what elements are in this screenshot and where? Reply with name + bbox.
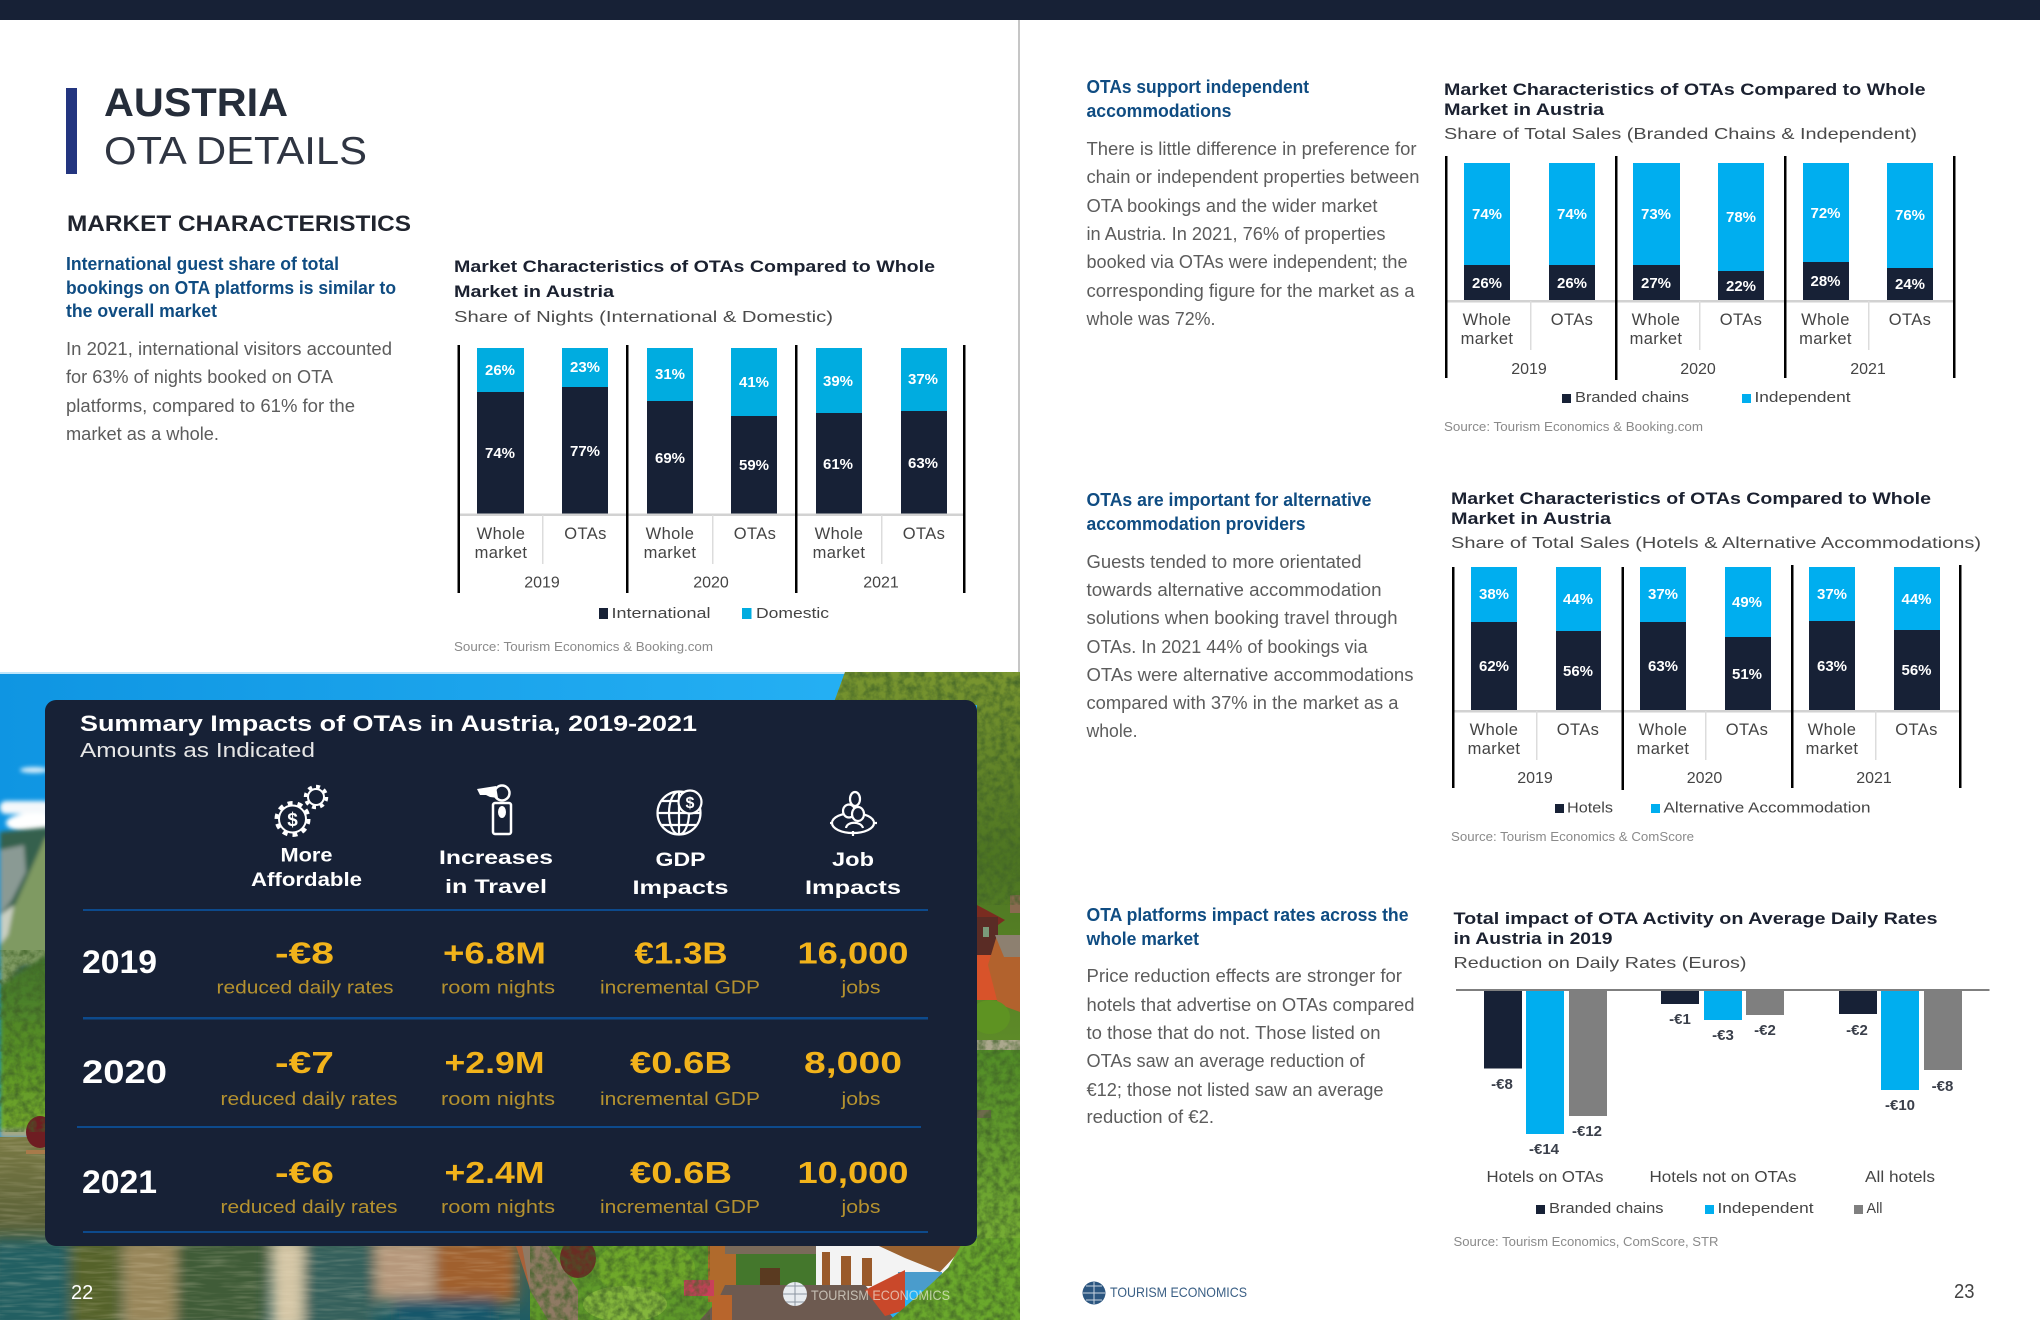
stacked bars: 26%	[485, 362, 515, 379]
chart heading: Market Characteristics of OTAs Compared to Whole	[454, 257, 935, 276]
page number 22: 22	[71, 1282, 93, 1304]
stacked bars: 38%	[1479, 586, 1509, 603]
row 2019	[82, 936, 908, 998]
value labels: -€2	[1846, 1022, 1868, 1039]
chart heading	[454, 257, 935, 326]
axis labels: Whole	[1808, 721, 1856, 739]
text block: impact on rates: €12; those not listed saw an average	[1086, 1080, 1384, 1100]
legend: Independent	[1718, 1200, 1814, 1217]
row 2019: 2019	[82, 944, 157, 980]
icon: globe with coin	[658, 790, 702, 835]
stacked bars: 51%	[1732, 666, 1762, 683]
text block: international guest share	[66, 254, 396, 444]
value labels: -€8	[1932, 1078, 1953, 1095]
axis labels: Whole	[815, 525, 863, 543]
stacked bars: 49%	[1732, 594, 1762, 611]
text block: impact on rates: hotels that advertise on OTAs compared	[1086, 995, 1414, 1015]
axis labels: OTAs	[1889, 311, 1931, 329]
row 2020: reduced daily rates	[220, 1089, 398, 1109]
stacked bars: 74%	[1557, 206, 1587, 223]
foliage texture	[0, 672, 1020, 1320]
axis labels: market	[1806, 740, 1858, 758]
text block: alternative accommodation: OTAs are important for alternative	[1086, 490, 1372, 510]
chart: reduction on daily rates	[1454, 909, 1990, 1249]
axis labels: OTAs	[1726, 721, 1768, 739]
text block: international guest share: International guest share of total	[66, 254, 339, 274]
row 2020	[82, 1045, 902, 1109]
chart heading	[1454, 909, 1938, 972]
right chalets	[970, 895, 1020, 1118]
stacked bars: 73%	[1641, 206, 1671, 223]
axis labels: 2019	[524, 574, 560, 592]
axis labels: market	[813, 544, 865, 562]
legend	[1555, 800, 1870, 816]
chart heading: Share of Total Sales (Hotels & Alternative Accommodations)	[1451, 535, 1981, 552]
logo: Tourism Economics: TOURISM ECONOMICS	[1110, 1284, 1247, 1300]
value labels: -€1	[1669, 1011, 1691, 1028]
axis labels: market	[1637, 740, 1689, 758]
source: Source: Tourism Economics & Booking.com	[454, 639, 713, 654]
stacked bars: 74%	[1472, 206, 1502, 223]
row 2020: €0.6B	[630, 1045, 732, 1080]
top navy bar	[0, 0, 2040, 20]
axis labels: Whole	[1470, 721, 1518, 739]
axis labels: OTAs	[1551, 311, 1593, 329]
background photo: Hallstatt lake village	[0, 672, 1020, 1320]
text block: impact on rates: OTA platforms impact rates across the	[1086, 905, 1408, 925]
stacked bars: 56%	[1901, 662, 1932, 679]
text block: independent accommodations: chain or independent properties between	[1086, 167, 1420, 187]
value labels: -€12	[1572, 1123, 1602, 1140]
axis labels: OTAs	[1895, 721, 1938, 739]
axis labels	[475, 525, 945, 592]
text block: independent accommodations	[1086, 77, 1420, 329]
legend	[1536, 1200, 1882, 1217]
panel: summary impacts	[45, 700, 977, 1246]
text block: alternative accommodation: Guests tended to more orientated	[1086, 552, 1362, 572]
axis labels: 2019	[1517, 770, 1553, 787]
text block: independent accommodations: in Austria. In 2021, 76% of properties	[1086, 224, 1386, 244]
column headers: Affordable	[251, 870, 362, 891]
left mountain	[0, 826, 60, 1138]
axis labels: Whole	[646, 525, 694, 543]
text block: independent accommodations: whole was 72%.	[1086, 309, 1216, 329]
row 2020: jobs	[840, 1089, 880, 1109]
axis labels: Whole	[1801, 311, 1850, 329]
logo on photo	[783, 1282, 950, 1306]
title block	[66, 81, 367, 174]
legend	[1562, 389, 1851, 406]
stacked bars: 31%	[655, 366, 685, 383]
panel heading	[80, 711, 697, 762]
text block: international guest share: for 63% of nights booked on OTA	[66, 367, 333, 387]
row 2021: 2021	[82, 1164, 157, 1200]
text block: independent accommodations: corresponding figure for the market as a	[1086, 281, 1416, 301]
icon: people in target	[830, 792, 877, 836]
stacked bars: 61%	[823, 456, 853, 473]
axis labels: 2020	[1680, 361, 1716, 378]
text block: impact on rates: OTAs saw an average reduction of	[1086, 1051, 1366, 1071]
legend: Branded chains	[1575, 389, 1689, 406]
chart: branded chains and independent	[1444, 80, 1956, 434]
page divider	[1018, 20, 1020, 672]
row 2019: -€8	[275, 936, 334, 970]
panel heading: Amounts as Indicated	[80, 740, 315, 762]
chart heading: Market in Austria	[1451, 509, 1612, 528]
row 2019: +6.8M	[443, 936, 546, 970]
stacked bars: 39%	[823, 373, 853, 390]
value labels	[1491, 1011, 1953, 1158]
stacked bars: 78%	[1726, 209, 1756, 226]
row 2019: 16,000	[798, 936, 908, 970]
stacked bars: 41%	[739, 374, 769, 391]
text block: independent accommodations: There is little difference in preference for	[1086, 139, 1416, 159]
title block: OTA DETAILS	[104, 130, 367, 173]
row 2019: room nights	[441, 978, 555, 998]
downward bars	[1484, 990, 1962, 1134]
axis labels: 2019	[1511, 361, 1547, 378]
text block: international guest share: In 2021, international visitors accounted	[66, 339, 392, 359]
text block: alternative accommodation: whole.	[1086, 721, 1138, 741]
axis labels: market	[644, 544, 696, 562]
category labels	[1486, 1169, 1935, 1186]
legend: All	[1866, 1200, 1882, 1217]
chart: share of nights	[454, 257, 966, 654]
value labels: -€2	[1754, 1022, 1776, 1039]
text block: impact on rates: reduction of €2.	[1086, 1107, 1214, 1127]
column headers: Impacts	[632, 878, 728, 899]
chart heading: Market in Austria	[454, 282, 615, 301]
stacked bars: 76%	[1895, 207, 1925, 224]
stacked bars: 62%	[1479, 658, 1509, 675]
text block: independent accommodations: booked via OTAs were independent; the	[1086, 252, 1408, 272]
row 2021: €0.6B	[630, 1155, 732, 1190]
row 2021: room nights	[441, 1197, 555, 1217]
axis labels: OTAs	[1720, 311, 1762, 329]
text block: impact on rates: Price reduction effects are stronger for	[1086, 966, 1402, 986]
row 2021: reduced daily rates	[220, 1197, 398, 1217]
chart heading: Share of Nights (International & Domestic)	[454, 309, 833, 326]
axis labels: Whole	[1632, 311, 1680, 329]
stacked bars: 72%	[1810, 205, 1841, 222]
text block: international guest share: bookings on OTA platforms is similar to	[66, 278, 396, 298]
column headers: More	[280, 846, 332, 866]
page number 23: 23	[1954, 1281, 1974, 1303]
stacked bars: 27%	[1641, 275, 1671, 292]
axis labels: Whole	[477, 525, 525, 543]
logo on photo: TOURISM ECONOMICS	[811, 1287, 950, 1303]
icon: globe with coin: $	[686, 795, 695, 812]
stacked bars: 74%	[485, 445, 515, 462]
stacked bars: 24%	[1895, 276, 1925, 293]
stacked bars: 77%	[570, 443, 600, 460]
red tree and jetty	[26, 1116, 54, 1148]
axis labels: Whole	[1463, 311, 1511, 329]
row 2021: -€6	[275, 1155, 334, 1190]
chart heading: Market Characteristics of OTAs Compared to Whole	[1451, 489, 1931, 508]
axis labels: 2021	[863, 574, 899, 592]
axis labels: 2021	[1856, 770, 1892, 787]
stacked bars: 26%	[1557, 275, 1587, 292]
text block: alternative accommodation: towards alternative accommodation	[1086, 580, 1382, 600]
legend: Branded chains	[1549, 1200, 1664, 1217]
chart heading: Market Characteristics of OTAs Compared to Whole	[1444, 80, 1926, 99]
axis labels: 2020	[693, 574, 729, 592]
axis labels: market	[1799, 330, 1852, 348]
value labels: -€3	[1712, 1027, 1734, 1044]
legend: Hotels	[1567, 800, 1613, 816]
bottom right village	[514, 1238, 1020, 1320]
axis labels: market	[1468, 740, 1520, 758]
axis labels	[1468, 721, 1938, 787]
value labels: -€8	[1491, 1076, 1513, 1093]
axis labels: 2020	[1687, 770, 1722, 787]
text block: impact on rates: whole market	[1086, 929, 1199, 949]
text block: independent accommodations: OTAs support independent	[1086, 77, 1309, 97]
stacked bars: 37%	[1648, 586, 1678, 603]
column headers: Increases	[439, 848, 553, 869]
axis labels: market	[475, 544, 527, 562]
stacked bars: 63%	[1817, 658, 1847, 675]
axis labels: OTAs	[903, 525, 945, 543]
right hillside	[833, 672, 1020, 1040]
text block: alternative accommodation	[1086, 490, 1414, 741]
stacked bars: 22%	[1726, 278, 1756, 295]
chart heading	[1451, 489, 1981, 552]
clouds	[0, 767, 66, 833]
stacked bars: 69%	[655, 450, 685, 467]
row 2020: room nights	[441, 1089, 555, 1109]
category labels: Hotels on OTAs	[1486, 1169, 1604, 1186]
stacked bars: 37%	[908, 371, 938, 388]
legend: Independent	[1754, 389, 1851, 406]
axis labels: market	[1630, 330, 1682, 348]
column headers: Job	[832, 850, 874, 871]
axis labels	[1461, 311, 1931, 378]
legend: Domestic	[756, 605, 830, 622]
row 2020: incremental GDP	[600, 1089, 760, 1109]
source: Source: Tourism Economics, ComScore, STR	[1454, 1234, 1718, 1249]
legend: Alternative Accommodation	[1664, 800, 1870, 816]
stacked bars: 44%	[1563, 591, 1593, 608]
column headers: in Travel	[445, 877, 547, 898]
text block: independent accommodations: accommodations	[1086, 101, 1232, 121]
stacked bars: 63%	[908, 455, 938, 472]
chart heading: Total impact of OTA Activity on Average Daily Rates	[1454, 909, 1938, 928]
stacked bars: 59%	[739, 457, 769, 474]
chart heading: in Austria in 2019	[1454, 929, 1612, 948]
axis labels: market	[1461, 330, 1513, 348]
stacked bars: 37%	[1817, 586, 1847, 603]
text block: impact on rates	[1086, 905, 1414, 1127]
axis labels: OTAs	[734, 525, 776, 543]
chart heading: Reduction on Daily Rates (Euros)	[1454, 955, 1746, 972]
lake reflections	[0, 1240, 516, 1320]
chart: hotels and alternative accommodations	[1451, 489, 1981, 844]
panel heading: Summary Impacts of OTAs in Austria, 2019-2021	[80, 711, 697, 736]
icon: gears with dollar	[276, 786, 326, 835]
stacked bars: 28%	[1810, 273, 1841, 290]
stacked bars	[1464, 163, 1933, 300]
row 2020: 2020	[82, 1054, 167, 1090]
row 2021	[82, 1155, 908, 1217]
axis labels: OTAs	[1557, 721, 1599, 739]
column headers	[251, 846, 901, 899]
row 2019: €1.3B	[634, 936, 728, 970]
category labels: All hotels	[1865, 1169, 1935, 1186]
text block: international guest share: the overall market	[66, 301, 217, 321]
chart heading: Market in Austria	[1444, 100, 1605, 119]
column headers: GDP	[656, 850, 706, 871]
title block: AUSTRIA	[104, 81, 288, 125]
lake	[0, 1137, 540, 1320]
row 2019: jobs	[840, 978, 880, 998]
section heading: market characteristics: MARKET CHARACTERISTICS	[67, 211, 411, 236]
text block: alternative accommodation: solutions when booking travel through	[1086, 608, 1398, 628]
axis labels: OTAs	[564, 525, 607, 543]
axis labels: Whole	[1639, 721, 1687, 739]
legend	[599, 605, 830, 622]
value labels: -€14	[1529, 1141, 1560, 1158]
row 2021: incremental GDP	[600, 1197, 760, 1217]
axis labels: 2021	[1850, 361, 1886, 378]
legend: International	[612, 605, 710, 622]
source: Source: Tourism Economics & Booking.com	[1444, 419, 1703, 434]
stacked bars: 63%	[1648, 658, 1678, 675]
row 2020: +2.9M	[444, 1045, 544, 1080]
icon: phone with key	[477, 786, 511, 834]
text block: alternative accommodation: accommodation providers	[1086, 514, 1306, 534]
text block: alternative accommodation: OTAs. In 2021 44% of bookings via	[1086, 637, 1368, 657]
stacked bars: 56%	[1563, 663, 1593, 680]
chart heading	[1444, 80, 1926, 143]
stacked bars	[477, 348, 947, 514]
row 2021: jobs	[840, 1197, 880, 1217]
icon: gears with dollar: $	[287, 810, 298, 831]
stacked bars: 26%	[1472, 275, 1502, 292]
row 2019: incremental GDP	[600, 978, 760, 998]
text block: independent accommodations: OTA bookings and the wider market	[1086, 196, 1378, 216]
value labels: -€10	[1885, 1097, 1915, 1114]
stacked bars: 23%	[570, 359, 600, 376]
text block: alternative accommodation: OTAs were alternative accommodations	[1086, 665, 1414, 685]
stacked bars: 44%	[1901, 591, 1932, 608]
text block: alternative accommodation: compared with 37% in the market as a	[1086, 693, 1400, 713]
chart heading: Share of Total Sales (Branded Chains & Independent)	[1444, 126, 1917, 143]
source: Source: Tourism Economics & ComScore	[1451, 829, 1694, 844]
column headers: Impacts	[805, 878, 901, 899]
stacked bars	[1471, 567, 1940, 710]
logo: Tourism Economics	[1082, 1282, 1247, 1304]
row 2020: -€7	[275, 1045, 334, 1080]
row 2020: 8,000	[804, 1045, 902, 1080]
text block: impact on rates: to those that do not. Those listed on	[1086, 1023, 1380, 1043]
row 2021: +2.4M	[444, 1155, 544, 1190]
text block: international guest share: market as a whole.	[66, 424, 219, 444]
text block: international guest share: platforms, compared to 61% for the	[66, 396, 355, 416]
row 2019: reduced daily rates	[216, 978, 394, 998]
row 2021: 10,000	[798, 1155, 908, 1190]
category labels: Hotels not on OTAs	[1650, 1169, 1796, 1186]
